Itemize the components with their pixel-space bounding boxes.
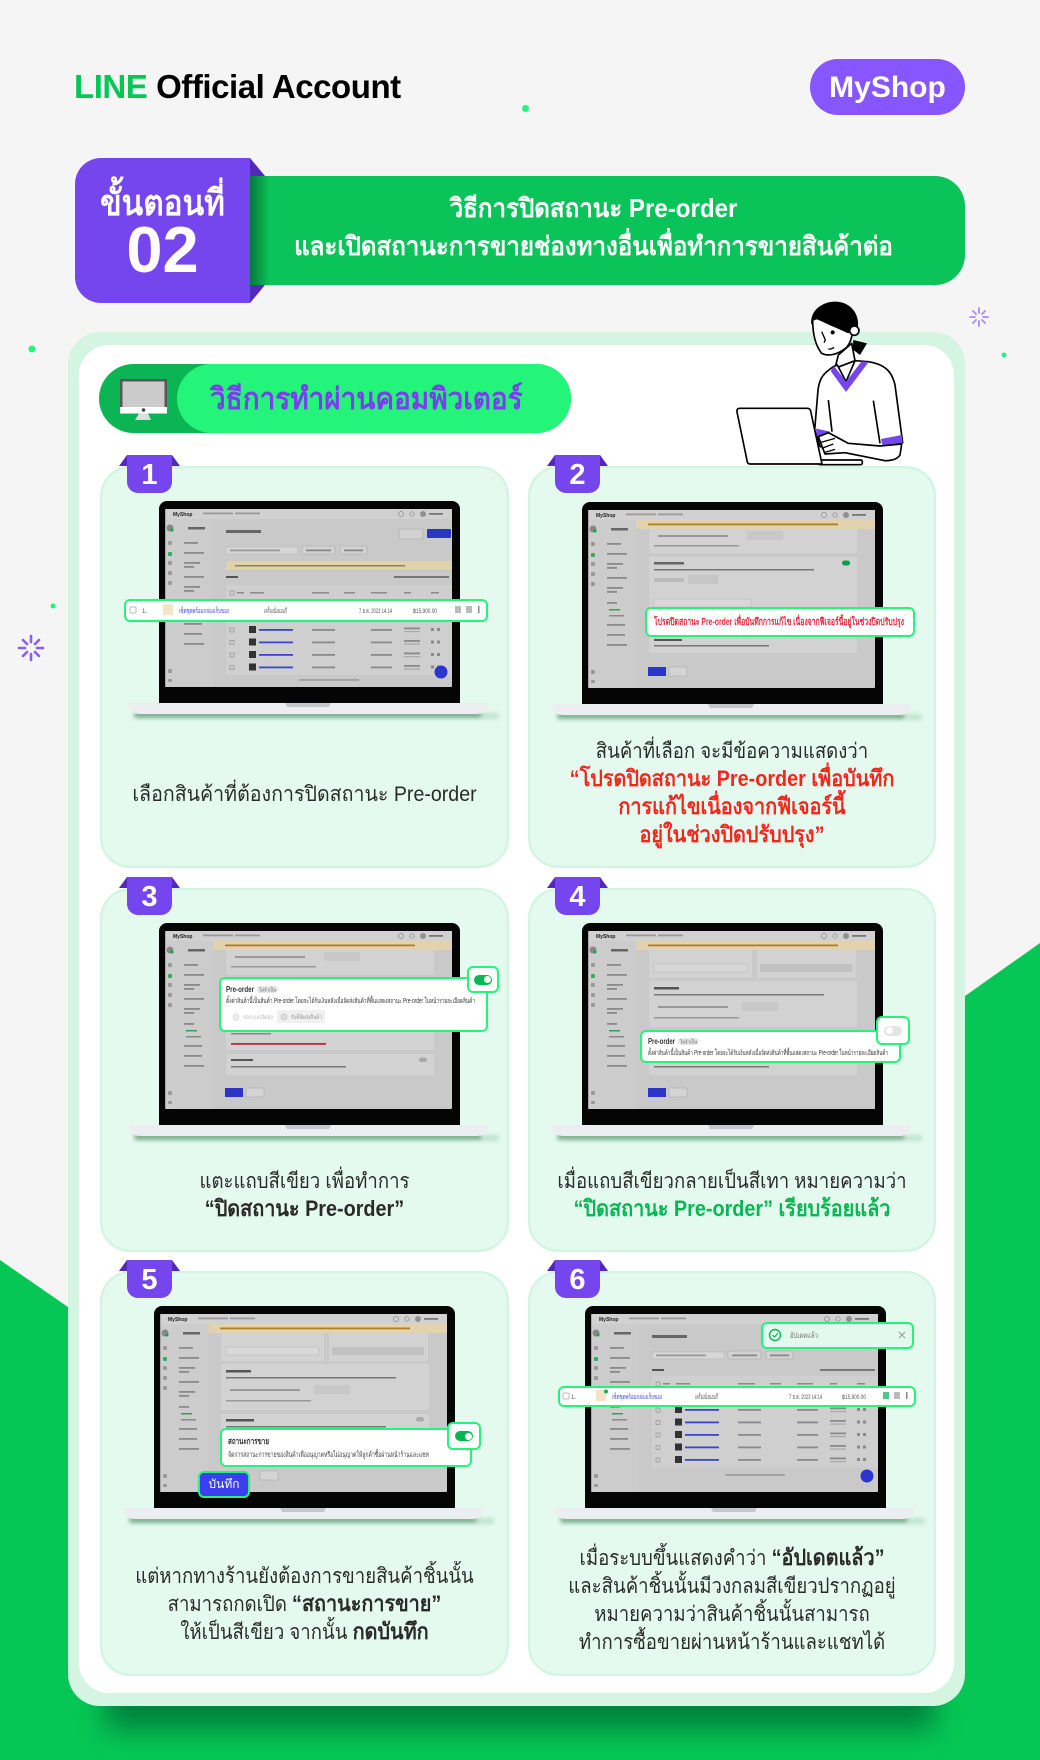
callout: selected product row: ฿15,900.00: [413, 607, 437, 615]
caption 6: และสินค้าชิ้นนั้นมีวงกลมสีเขียวปรากฏอยู่: [568, 1575, 896, 1598]
toggle on: [447, 1422, 481, 1450]
callout: pre-order off: ไม่จำเป็น: [679, 1038, 697, 1046]
badge 4: [547, 877, 608, 915]
badge 4: 4: [569, 881, 586, 913]
caption 3: [199, 1166, 410, 1220]
toggle off: [876, 1016, 910, 1045]
step number: 02: [126, 213, 199, 286]
save button: [198, 1471, 250, 1498]
callout: pre-order off: Pre-order: [648, 1037, 675, 1046]
caption 2: [570, 736, 894, 848]
callout: pre-order settings: รับที่จัดส่งสินค้า: [291, 1013, 322, 1021]
logo: LINE Official Account: LINE Official Account: [74, 68, 401, 105]
caption 5: ให้เป็นสีเขียว จากนั้น กดบันทึก: [180, 1619, 429, 1644]
callout: pre-order settings: [219, 977, 488, 1032]
save button: บันทึก: [208, 1477, 240, 1491]
caption 6: [568, 1543, 896, 1654]
callout: updated product row: 7 ธ.ค. 2023 14:14: [789, 1394, 822, 1401]
section heading pill: [99, 364, 571, 433]
callout: updated product row: เซ็ตชุดพร้อมกล่องเก็บของ: [612, 1392, 662, 1401]
badge 5: [119, 1260, 180, 1298]
caption 2: “โปรดปิดสถานะ Pre-order เพื่อบันทึก: [570, 766, 894, 791]
caption 1: เลือกสินค้าที่ต้องการปิดสถานะ Pre-order: [132, 783, 477, 806]
card 3: [100, 888, 509, 1252]
callout: pre-order settings: รอระบบจัดส่ง: [243, 1014, 273, 1021]
laptop: updated product list: [555, 1306, 926, 1526]
laptop: pre-order form: MyShop: [596, 513, 615, 519]
toast: updated: [761, 1322, 914, 1349]
badge 3: 3: [141, 881, 158, 913]
caption 2: การแก้ไขเนื่องจากฟีเจอร์นี้: [618, 794, 846, 819]
laptop: pre-order toggle on: MyShop: [173, 934, 192, 940]
badge 3: [119, 877, 180, 915]
callout: sale status: สถานะการขาย: [228, 1436, 269, 1446]
badge 6: [547, 1260, 608, 1298]
badge 6: 6: [569, 1264, 586, 1296]
decorative dot: [522, 105, 529, 112]
callout: pre-order settings: Pre-order: [226, 985, 254, 994]
callout: pre-order off: [640, 1030, 901, 1063]
badge 1: 1: [141, 459, 158, 491]
card 2: [528, 466, 936, 868]
green title band: [250, 176, 965, 285]
caption 5: สามารถกดเปิด “สถานะการขาย”: [168, 1591, 441, 1616]
callout: updated product row: 1.: [571, 1395, 576, 1401]
heading text: วิธีการทำผ่านคอมพิวเตอร์: [210, 383, 523, 416]
caption 4: เมื่อแถบสีเขียวกลายเป็นสีเทา หมายความว่า: [557, 1170, 907, 1193]
callout: selected product row: [124, 599, 488, 622]
callout: selected product row: เครื่องนั่งนอนรี: [264, 606, 287, 615]
caption 4: [557, 1166, 907, 1220]
toast: updated: อัปเดตแล้ว: [790, 1331, 818, 1340]
badge 1: [119, 455, 180, 493]
icon: desktop computer: [120, 379, 167, 420]
main outer panel: [68, 332, 965, 1706]
laptop: product list: [129, 501, 500, 722]
heading: computer method: [177, 364, 571, 433]
card 6: [528, 1271, 936, 1676]
card 5: [100, 1271, 509, 1676]
caption 3: “ปิดสถานะ Pre-order”: [205, 1196, 404, 1220]
badge 2: [547, 455, 608, 493]
title bar: [75, 158, 965, 303]
badge 2: 2: [569, 459, 586, 491]
caption 3: แตะแถบสีเขียว เพื่อทำการ: [199, 1170, 410, 1193]
caption 6: หมายความว่าสินค้าชิ้นนั้นสามารถ: [594, 1603, 870, 1626]
panel shadow: [89, 1701, 951, 1746]
decorative dots and sparkles: [18, 307, 1006, 662]
laptop: pre-order toggle off: MyShop: [596, 934, 615, 940]
caption 5: [135, 1561, 474, 1644]
toggle on: [467, 966, 499, 993]
laptop: product list: MyShop: [173, 512, 192, 518]
laptop: updated product list: MyShop: [599, 1317, 618, 1323]
step label: ขั้นตอนที่: [100, 182, 225, 223]
callout: selected product row: 7 ธ.ค. 2023 14:14: [359, 608, 392, 615]
title text: [294, 193, 893, 261]
card 1: [100, 466, 509, 868]
step box: ขั้นตอนที่ 02: [75, 158, 250, 303]
illustration: woman with laptop: [736, 302, 904, 466]
caption 4: “ปิดสถานะ Pre-order” เรียบร้อยแล้ว: [574, 1196, 890, 1220]
caption 5: แต่หากทางร้านยังต้องการขายสินค้าชิ้นนั้น: [135, 1565, 474, 1588]
ribbon fold top: [250, 158, 265, 176]
callout: updated product row: [558, 1386, 916, 1407]
callout: selected product row: 1.: [142, 609, 147, 615]
brand pill: MyShop: MyShop: [829, 71, 946, 104]
brand pill: MyShop: [810, 59, 965, 115]
card 4: [528, 888, 936, 1252]
caption 6: เมื่อระบบขึ้นแสดงคำว่า “อัปเดตแล้ว”: [580, 1545, 884, 1570]
laptop: sale status form: [124, 1306, 496, 1526]
laptop: pre-order toggle off: [552, 923, 924, 1144]
ribbon fold bottom: [250, 285, 265, 303]
callout: updated product row: ฿15,900.00: [842, 1393, 866, 1401]
callout: selected product row: เซ็ตชุดพร้อมกล่องเก็บของ: [179, 606, 229, 615]
title text: วิธีการปิดสถานะ Pre-order: [450, 193, 737, 223]
callout: warning message: [645, 607, 915, 637]
callout: updated product row: เครื่องนั่งนอนรี: [695, 1392, 718, 1401]
callout: sale status: [220, 1428, 472, 1467]
title text: และเปิดสถานะการขายช่องทางอื่นเพื่อทำการขายสินค้าต่อ: [294, 231, 893, 261]
badge 5: 5: [141, 1264, 158, 1296]
caption 6: ทำการซื้อขายผ่านหน้าร้านและแชทได้: [579, 1631, 885, 1654]
laptop: sale status form: MyShop: [168, 1317, 187, 1323]
main white panel: [79, 345, 954, 1693]
callout: pre-order settings: ไม่จำเป็น: [258, 986, 276, 994]
laptop: pre-order form: [552, 502, 924, 722]
caption 2: สินค้าที่เลือก จะมีข้อความแสดงว่า: [596, 740, 868, 763]
caption 2: อยู่ในช่วงปิดปรับปรุง”: [639, 822, 825, 847]
laptop: pre-order toggle on: [129, 923, 500, 1144]
